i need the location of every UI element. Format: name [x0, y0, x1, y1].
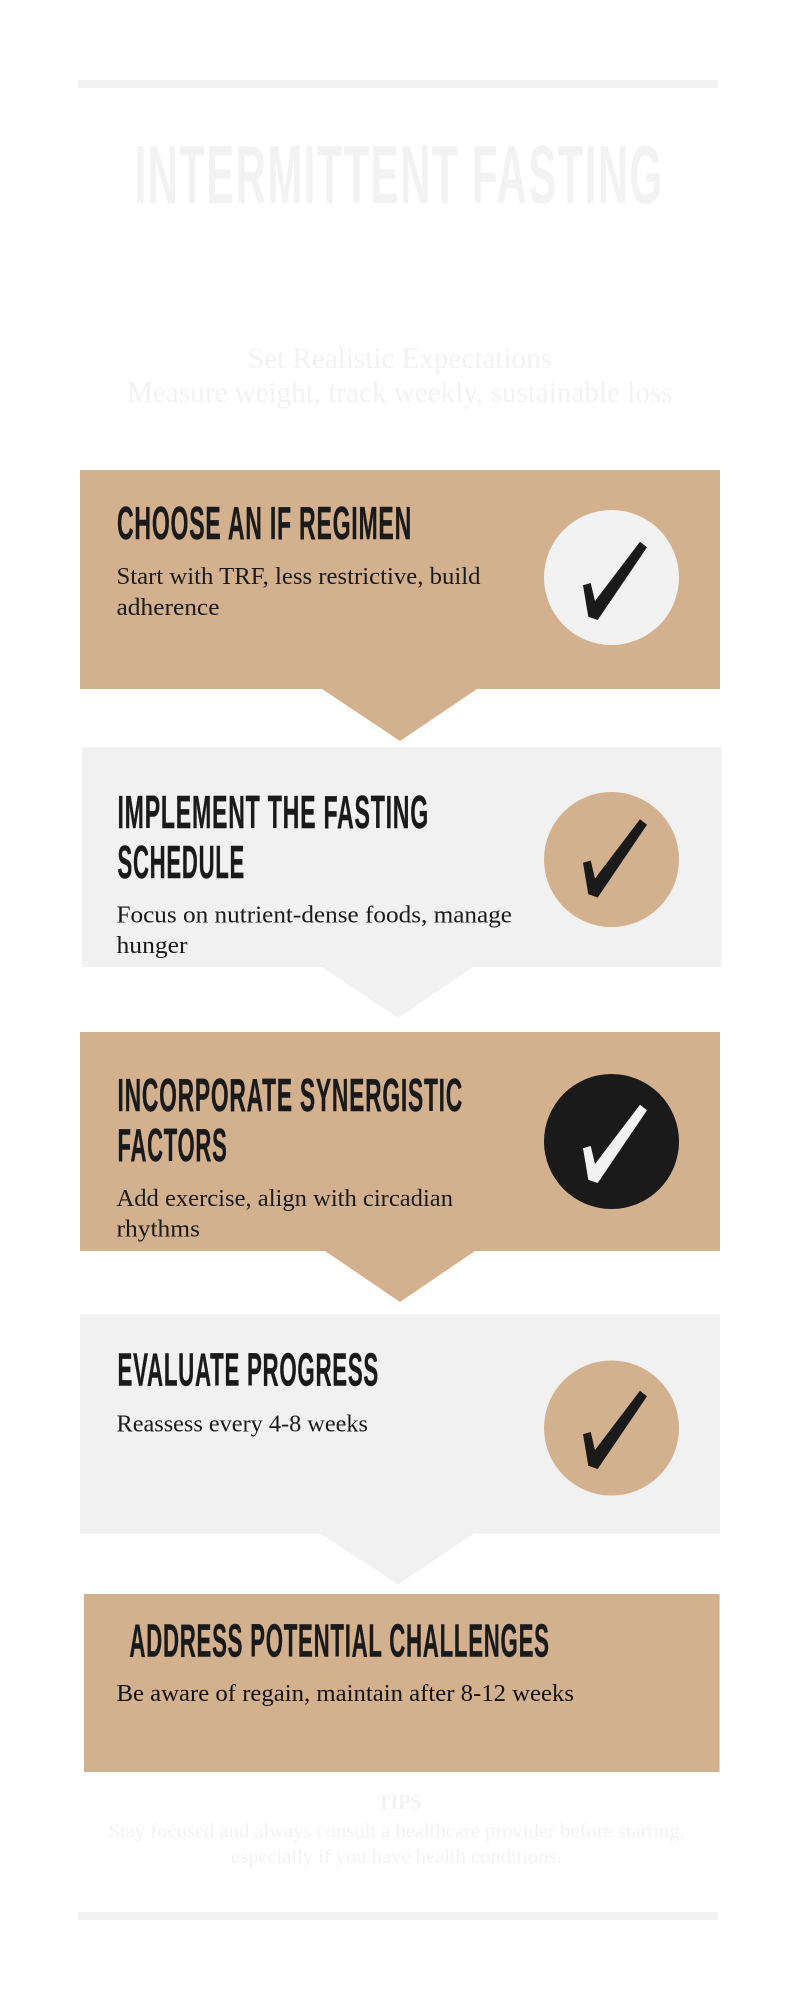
text: step 1 description: Start with TRF, less restrictive, build [116, 563, 480, 590]
tips text block: TIPS [377, 1790, 421, 1814]
subtitle text block: Measure weight, track weekly, sustainable loss [127, 376, 672, 409]
text: step 3 description: rhythms [116, 1216, 200, 1243]
panel: step 4 evaluate progress [80, 1314, 720, 1584]
panel: step 2 implement the fasting schedule [82, 747, 722, 1018]
icon: check mark on light circle [544, 510, 679, 645]
subtitle text block: Set Realistic Expectations [248, 342, 552, 375]
heading: step 2: IMPLEMENT THE FASTING [118, 786, 429, 838]
panel: step 3 incorporate synergistic factors [80, 1032, 720, 1302]
panel: step 5 address potential challenges [84, 1594, 720, 1772]
tips text block: Stay focused and always consult a healthcare provider before starting, [109, 1820, 685, 1842]
text: step 1 description [116, 563, 480, 621]
panel: step 1 choose an IF regimen [80, 470, 720, 741]
arrow: step 2 to step 3 [322, 967, 473, 1018]
subtitle text block [127, 342, 672, 409]
text: step 2 description: hunger [116, 932, 188, 959]
tips text block [109, 1790, 685, 1868]
text: step 3 description: Add exercise, align with circadian [116, 1185, 453, 1212]
heading: step 2: SCHEDULE [118, 836, 245, 888]
text: step 4 description: Reassess every 4-8 weeks [116, 1410, 368, 1437]
arrow: step 3 to step 4 [325, 1251, 475, 1302]
arrow: step 1 to step 2 [322, 689, 477, 741]
text: step 3 description [116, 1185, 453, 1243]
tips text block: especially if you have health conditions. [231, 1846, 562, 1868]
icon: check mark on tan circle [544, 1360, 679, 1496]
heading: step 3: INCORPORATE SYNERGISTIC [118, 1069, 463, 1121]
text: step 2 description [116, 902, 512, 959]
text: step 1 description: adherence [116, 594, 220, 621]
arrow: step 4 to step 5 [320, 1534, 474, 1584]
text: step 2 description: Focus on nutrient-dense foods, manage [116, 902, 512, 929]
panel: step 4 evaluate progress: EVALUATE PROGRESS [118, 1344, 379, 1396]
icon: check mark on dark circle [544, 1074, 679, 1209]
icon: check mark on tan circle [544, 792, 679, 927]
heading: step 1: CHOOSE AN IF REGIMEN [117, 497, 412, 549]
heading: step 2 [118, 786, 429, 888]
heading: step 3: FACTORS [118, 1119, 228, 1171]
heading: step 3 [118, 1069, 463, 1171]
text: step 5 description: Be aware of regain, maintain after 8-12 weeks [116, 1680, 574, 1707]
